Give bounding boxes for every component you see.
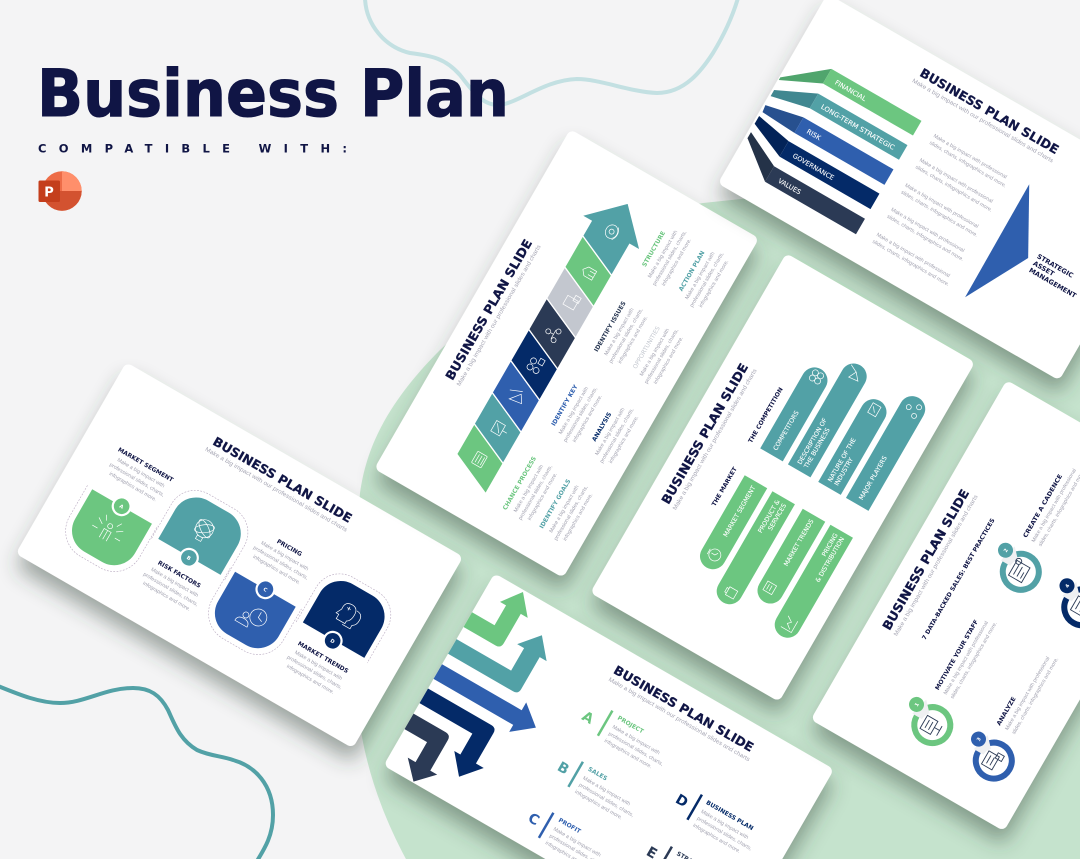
card xyxy=(374,129,759,578)
slide subheading: Make a big impact with our professional slides and charts xyxy=(607,677,750,763)
text: market segment: professional slides, charts, xyxy=(108,462,165,498)
text: pricing: professional slides, charts, xyxy=(252,545,309,581)
text: identify goals: IDENTIFY GOALS xyxy=(538,478,572,530)
item D: business plan: Make a big impact with xyxy=(700,809,749,841)
body text column: Make a big impact with professional xyxy=(890,207,965,254)
slide subheading: Make a big impact with our professional slides and charts xyxy=(911,78,1054,164)
text: action plan: professional slides, charts, xyxy=(689,251,725,308)
slide: arrows with lettered list xyxy=(384,573,834,859)
text: identify goals xyxy=(537,475,597,546)
layer: financial: FINANCIAL xyxy=(833,79,868,103)
item D: business plan: BUSINESS PLAN xyxy=(705,799,754,832)
slide: strategic layers xyxy=(718,0,1080,380)
item C: profit xyxy=(521,803,615,859)
blue triangle xyxy=(964,184,1060,315)
label: strategic asset management: MANAGEMENT xyxy=(1027,266,1078,300)
item B: sales: B xyxy=(554,759,572,778)
shape C xyxy=(206,572,296,657)
body text column: slides, charts, infographics and more. xyxy=(914,164,993,214)
ring 1: 1 xyxy=(914,701,921,708)
ring 1 xyxy=(896,693,957,750)
slide: arrow steps xyxy=(374,129,759,578)
icon: PowerPoint logo xyxy=(38,171,82,211)
green background circle xyxy=(355,197,1080,859)
icon: heads xyxy=(333,600,364,631)
body text column: Make a big impact with professional xyxy=(875,232,951,279)
text: identify key: Make a big impact with xyxy=(558,386,590,436)
text: opportunities: professional slides, charts, xyxy=(644,328,680,385)
card xyxy=(590,253,975,702)
layer: values xyxy=(733,132,874,234)
text: analysis xyxy=(583,398,642,468)
text: action plan: ACTION PLAN xyxy=(678,250,707,293)
text: analyze: Make a big impact with professional xyxy=(1004,656,1051,732)
teal pills: INDUSTRY xyxy=(833,457,855,487)
icon: PowerPoint logo: P xyxy=(44,186,54,200)
label: strategic asset management: ASSET xyxy=(1031,259,1056,278)
slide heading: BUSINESS PLAN SLIDE xyxy=(658,361,751,507)
ring 4: 4 xyxy=(1064,583,1072,589)
text: market segment: MARKET SEGMENT xyxy=(117,446,175,484)
text: motivate your staff: slides, charts, infographics and more. xyxy=(950,621,999,700)
layer: long-term strategic xyxy=(771,74,907,168)
ring 2: 2 xyxy=(1003,547,1010,554)
text: motivate your staff: Make a big impact with professional xyxy=(943,620,990,696)
text: create a cadence: CREATE A CADENCE xyxy=(1022,473,1064,539)
text: action plan xyxy=(673,242,732,312)
text: analysis: professional slides, charts, xyxy=(599,407,635,464)
text: risk factors: RISK FACTORS xyxy=(156,560,202,590)
icon: clock and person xyxy=(235,601,270,634)
slide heading: BUSINESS PLAN SLIDE xyxy=(442,237,535,383)
slide: market segment xyxy=(16,362,463,748)
green pills: PRICING xyxy=(821,532,840,558)
green pills: & DISTRIBUTION xyxy=(815,536,846,584)
slide subheading: Make a big impact with our professional slides and charts xyxy=(456,244,543,388)
text: chance process: professional slides, charts, xyxy=(518,464,554,521)
layer: risk xyxy=(761,98,893,185)
layer: long-term strategic: LONG-TERM STRATEGIC xyxy=(819,103,896,152)
body text column xyxy=(871,133,1011,288)
step icons xyxy=(469,221,624,470)
arrow chart xyxy=(437,186,658,500)
ring 4 xyxy=(1046,575,1080,632)
item A: project: infographics and more. xyxy=(603,738,653,770)
text: action plan: Make a big impact with xyxy=(684,251,716,301)
text: motivate your staff xyxy=(934,612,999,700)
ring 2 xyxy=(985,540,1046,596)
arrow: green xyxy=(464,575,538,652)
text: market trends: infographics and more. xyxy=(285,664,335,696)
text: analyze: slides, charts, infographics and more. xyxy=(1011,657,1060,736)
text: risk factors xyxy=(138,556,208,615)
main title: Business Plan xyxy=(37,57,509,132)
slide heading: BUSINESS PLAN SLIDE xyxy=(879,487,972,633)
text: market trends: MARKET TRENDS xyxy=(296,640,349,675)
text: create a cadence: Make a big impact with professional xyxy=(1031,468,1078,544)
text: identify issues: Make a big impact with xyxy=(603,307,636,357)
item C: profit: Make a big impact with xyxy=(552,826,602,859)
badge B: B xyxy=(185,555,192,562)
ring 3: 3 xyxy=(976,736,983,743)
text: structure xyxy=(635,220,695,291)
layer: values: VALUES xyxy=(777,177,802,196)
text: identify goals: Make a big impact with xyxy=(548,484,581,534)
badge A xyxy=(108,493,135,520)
arrow: blue xyxy=(430,656,544,742)
slide: market and competition xyxy=(590,253,975,702)
body text column: slides, charts, infographics and more. xyxy=(871,239,950,288)
text: opportunities xyxy=(628,319,687,389)
subtitle: compatible with: COMPATIBLE WITH: xyxy=(38,142,347,156)
icon: idea bulb xyxy=(189,516,218,545)
icon: person with arrows xyxy=(89,511,128,547)
text: risk factors: infographics and more. xyxy=(142,581,191,613)
badge A: A xyxy=(118,504,124,511)
section heading: 7 DATA-BACKED SALES: BEST PRACTICES xyxy=(921,517,997,641)
item A: project xyxy=(576,699,674,775)
green pills: SERVICES xyxy=(767,502,788,532)
shape D xyxy=(303,572,393,658)
item B: sales: infographics and more. xyxy=(574,789,623,821)
card xyxy=(16,362,463,748)
slide: rings xyxy=(811,380,1080,831)
green pills: MARKET TRENDS xyxy=(783,518,815,568)
slide subheading: Make a big impact with our professional slides and charts xyxy=(893,494,980,638)
teal pills xyxy=(760,342,930,511)
text: pricing: Make a big impact with xyxy=(260,540,309,572)
text: chance process: infographics and more. xyxy=(527,472,559,522)
green pills: PRODUCT & xyxy=(757,499,782,534)
text: opportunities: infographics and more. xyxy=(653,336,685,385)
item D: business plan: professional slides, charts, xyxy=(696,816,753,852)
slide heading: BUSINESS PLAN SLIDE xyxy=(917,65,1062,157)
arrow: teal xyxy=(448,599,557,698)
shape A xyxy=(63,489,152,574)
text: market trends: Make a big impact with xyxy=(293,650,343,682)
slide subheading: Make a big impact with our professional slides and charts xyxy=(672,368,759,512)
text: identify key: infographics and more. xyxy=(572,394,604,444)
text: pricing: PRICING xyxy=(275,538,303,558)
badge B xyxy=(175,544,203,571)
body text column: Make a big impact with professional xyxy=(904,183,979,230)
layer: risk: RISK xyxy=(805,128,823,142)
dashed outlines xyxy=(55,439,401,707)
item A: project: PROJECT xyxy=(616,715,645,736)
text: identify issues: infographics and more. xyxy=(617,315,649,365)
text: structure: STRUCTURE xyxy=(641,230,667,268)
text: identify goals: professional slides, charts, xyxy=(553,485,590,542)
teal pills: DESCRIPTION OF xyxy=(797,417,829,466)
text: market trends xyxy=(282,639,352,698)
text: identify issues: IDENTIFY ISSUES xyxy=(593,300,628,353)
item B: sales: professional slides, charts, xyxy=(578,782,635,819)
item A: project: professional slides, charts, xyxy=(607,731,664,768)
text: action plan: infographics and more. xyxy=(698,259,730,309)
item A: project: A xyxy=(579,709,596,728)
card xyxy=(718,0,1080,380)
text: pricing: infographics and more. xyxy=(252,554,301,586)
text: opportunities: OPPORTUNITIES xyxy=(632,325,662,370)
text: market segment: Make a big impact with xyxy=(116,457,166,489)
badge C: C xyxy=(262,587,268,594)
card xyxy=(384,573,834,859)
bottom wave line xyxy=(0,686,273,859)
text: chance process xyxy=(501,455,561,525)
badge D xyxy=(319,627,346,654)
text: risk factors: Make a big impact with xyxy=(150,567,199,599)
text: structure: infographics and more. xyxy=(661,238,693,287)
body text column: slides, charts, infographics and more. xyxy=(928,140,1007,189)
text: market segment: infographics and more. xyxy=(108,471,157,503)
text: identify key xyxy=(546,377,606,447)
text: structure: professional slides, charts, xyxy=(652,230,688,287)
body text column: slides, charts, infographics and more. xyxy=(900,190,979,239)
green pills: MARKET SEGMENT xyxy=(722,485,757,538)
heading: the market: THE MARKET xyxy=(711,465,739,508)
card xyxy=(811,380,1080,831)
text: analyze: ANALYZE xyxy=(996,696,1018,727)
text: analysis: ANALYSIS xyxy=(591,411,613,443)
text: identify key: professional slides, charts, xyxy=(563,386,599,443)
item D: business plan: D xyxy=(673,792,691,811)
arrow: slate xyxy=(384,714,458,790)
text: analysis: Make a big impact with xyxy=(594,407,626,457)
body text column: Make a big impact with professional xyxy=(918,158,994,205)
text: identify issues xyxy=(592,298,652,369)
layer: governance xyxy=(747,116,883,209)
text: identify key: IDENTIFY KEY xyxy=(550,383,580,427)
item B: sales: SALES xyxy=(587,766,608,782)
item A: project: Make a big impact with xyxy=(611,724,661,756)
text: analysis: infographics and more. xyxy=(608,415,640,465)
text: chance process: Make a big impact with xyxy=(513,464,545,514)
ring 3 xyxy=(958,728,1019,785)
text: pricing xyxy=(248,529,318,588)
teal pills: MAJOR PLAYERS xyxy=(858,455,889,501)
top wave line xyxy=(365,0,738,105)
slide subheading: Make a big impact with our professional slides and charts xyxy=(204,447,348,534)
slide heading: BUSINESS PLAN SLIDE xyxy=(210,434,355,526)
label: strategic asset management: STRATEGIC xyxy=(1035,252,1075,280)
teal pills: COMPETITORS xyxy=(772,410,801,452)
layer: governance: GOVERNANCE xyxy=(791,152,835,182)
shape B xyxy=(158,489,250,575)
item B: sales xyxy=(550,752,644,826)
slide heading: BUSINESS PLAN SLIDE xyxy=(611,662,756,755)
item B: sales: Make a big impact with xyxy=(582,775,631,808)
text: identify goals: infographics and more. xyxy=(562,492,594,542)
arrow: navy xyxy=(398,688,504,785)
text: opportunities: Make a big impact with xyxy=(639,328,671,377)
text: market trends: professional slides, charts, xyxy=(286,655,343,691)
green pills xyxy=(684,475,853,643)
text: chance process: CHANCE PROCESS xyxy=(502,455,538,512)
text: motivate your staff: MOTIVATE YOUR STAFF xyxy=(934,619,980,692)
text: identify issues: professional slides, charts, xyxy=(608,307,645,365)
item E: strategy xyxy=(641,837,709,859)
text: structure: Make a big impact with xyxy=(647,230,679,279)
text: market segment xyxy=(104,446,175,506)
text: analyze xyxy=(996,648,1060,736)
badge C xyxy=(252,576,279,603)
teal pills: NATURE OF THE xyxy=(827,437,858,483)
item D: business plan: infographics and more. xyxy=(692,823,741,855)
item C: profit: C xyxy=(525,810,542,829)
item D: business plan xyxy=(668,785,763,859)
layer: financial xyxy=(779,49,921,152)
item C: profit: PROFIT xyxy=(557,817,583,836)
teal pills: THE BUSINESS xyxy=(803,427,832,471)
heading: the competition: THE COMPETITION xyxy=(747,386,785,444)
text: risk factors: professional slides, charts, xyxy=(142,572,199,608)
body text column: slides, charts, infographics and more. xyxy=(886,214,965,263)
body text column: Make a big impact with professional xyxy=(932,133,1008,180)
badge D: D xyxy=(329,638,335,645)
